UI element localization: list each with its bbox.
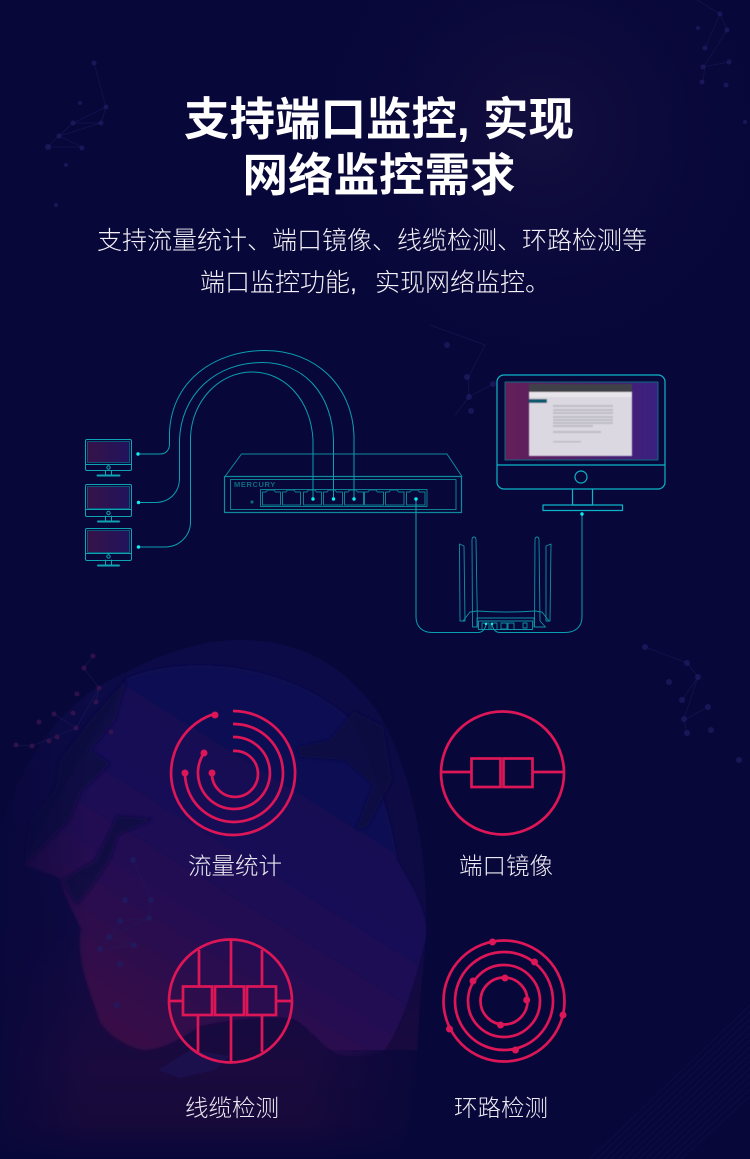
label: loop detection: 环路检测	[454, 1095, 548, 1121]
connection dots	[136, 452, 584, 625]
logo: MERCURY: MERCURY	[234, 480, 276, 489]
label: cable test: 线缆检测	[185, 1095, 279, 1121]
icon: computer 2	[86, 484, 132, 522]
subtitle text: ,	[350, 269, 357, 297]
icon: traffic statistics	[171, 711, 295, 835]
title: 支持端口监控 实现	[184, 94, 574, 145]
title: 网络监控需求	[242, 150, 516, 201]
title	[184, 94, 574, 201]
subtitle text	[97, 227, 647, 297]
icon: monitor with management page	[497, 375, 665, 510]
router	[460, 537, 551, 630]
cable: switch to router to monitor	[416, 499, 582, 632]
title: ,	[457, 94, 470, 145]
icon: loop detection	[444, 938, 566, 1062]
switch	[224, 454, 462, 512]
panel: network diagram	[86, 350, 665, 632]
icon: computer 1	[86, 440, 132, 476]
icon: cable test	[169, 940, 292, 1062]
label: traffic statistics: 流量统计	[188, 853, 282, 879]
subtitle text: 支持流量统计、端口镜像、线缆检测、环路检测等	[97, 227, 647, 255]
icon: computer 3	[86, 528, 132, 566]
label: port mirroring: 端口镜像	[459, 853, 553, 879]
icon: port mirroring	[441, 712, 564, 834]
cables: computers to switch	[138, 350, 354, 547]
subtitle text: 端口监控功能 实现网络监控。	[200, 269, 550, 297]
